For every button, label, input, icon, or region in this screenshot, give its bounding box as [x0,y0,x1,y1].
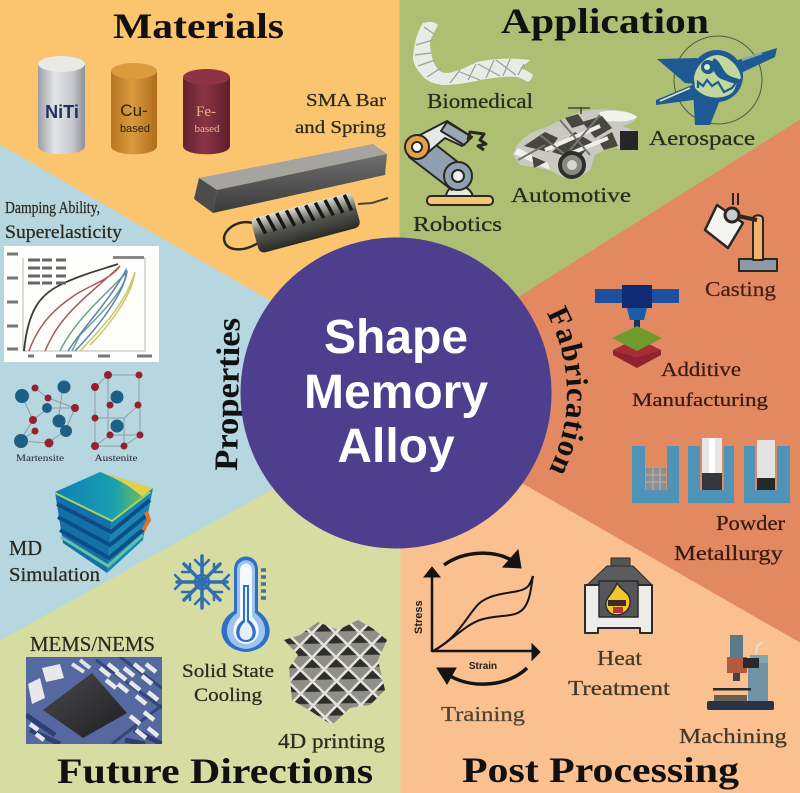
label: damping ability, superelasticity: Superelasticity [5,222,123,243]
chart icon: training stress strain [413,550,540,684]
label: additive manufacturing: Manufacturing [632,390,769,411]
center title: Memory [304,366,488,419]
label: additive manufacturing [632,359,769,411]
label: strain: Strain [469,661,497,672]
icon: Fe-based cylinder: based [194,123,220,135]
label: casting: Casting [705,277,777,301]
icon: 4D printed lattice [284,620,387,725]
label: stress: Stress [413,600,425,634]
label: powder metallurgy: Metallurgy [674,541,784,565]
panel: properties background [0,145,400,640]
heading: properties: Properties [209,317,248,471]
label: powder metallurgy [674,511,785,565]
label: heat treatment [568,646,670,700]
label: MD simulation [9,536,100,586]
icon: biomedical bone stent [413,22,533,85]
icon: automotive chassis [513,107,638,180]
icon: Cu-based cylinder [111,63,157,154]
label: robotics: Robotics [413,212,502,236]
panel: fabrication background [400,120,800,643]
icon: Fe-based cylinder: Fe- [196,104,216,120]
icon: robot arm [405,121,493,205]
icon: additive manufacturing printer [595,285,679,368]
label: solid state cooling: Solid State [182,661,274,682]
chart: superelastic stress strain curves [4,246,159,362]
icon: casting ladle [705,193,777,271]
heading: materials: Materials [113,6,284,46]
label: SMA bar and spring: and Spring [295,117,386,137]
icon: Fe-based cylinder [183,69,230,154]
icon: austenite crystal [91,371,144,463]
heading: application: Application [501,1,709,41]
icon: MD simulation cube [55,472,153,573]
heading: fabrication [547,304,588,474]
icon: machining mill [707,635,774,710]
heading: post processing: Post Processing [462,750,739,790]
label: damping ability, superelasticity [5,198,123,243]
label: MEMS/NEMS: MEMS/NEMS [30,632,155,656]
label: additive manufacturing: Additive [661,359,741,381]
icon: thermometer [222,556,270,652]
panel: future directions background [0,393,400,793]
panel: post processing background [400,393,800,793]
panel: materials background [0,0,400,393]
label: training: Training [441,702,526,726]
label: automotive: Automotive [511,183,631,207]
label: martensite: Martensite [16,453,64,463]
icon: snowflake [175,556,229,608]
label: damping ability, superelasticity: Damping Ability, [5,198,100,217]
icon: Cu-based cylinder: Cu- [120,101,148,120]
icon: aerospace plane and globe [656,36,777,125]
center title: Alloy [337,420,455,473]
center circle [240,238,552,548]
label: MD simulation: MD [9,536,42,560]
center title [304,311,488,473]
heading: future directions: Future Directions [57,751,373,791]
label: heat treatment: Treatment [568,676,670,700]
label: biomedical: Biomedical [427,89,533,113]
icon: Cu-based cylinder: based [120,123,150,135]
icon: NiTi cylinder: NiTi [45,102,79,122]
label: MD simulation: Simulation [9,564,100,586]
icon: heat treatment furnace [585,558,652,633]
icon: martensite crystal [14,380,79,463]
label: solid state cooling [182,661,274,706]
label: heat treatment: Heat [597,646,642,670]
center title: Shape [324,311,468,364]
label: powder metallurgy: Powder [716,511,785,535]
label: austenite: Austenite [94,453,138,463]
icon: SMA bar [194,144,387,213]
label: machining: Machining [679,724,788,748]
label: solid state cooling: Cooling [194,685,263,706]
label: aerospace: Aerospace [649,126,755,150]
label: 4D printing: 4D printing [278,729,386,753]
heading: fabrication: Fabrication [547,304,588,474]
image: MEMS chip [26,657,162,744]
icon: NiTi cylinder [38,56,85,154]
panel: application background [400,0,800,393]
icon: spring [224,192,388,254]
icon: powder metallurgy molds [632,438,790,503]
label: SMA bar and spring [295,90,386,137]
label: SMA bar and spring: SMA Bar [306,90,386,110]
